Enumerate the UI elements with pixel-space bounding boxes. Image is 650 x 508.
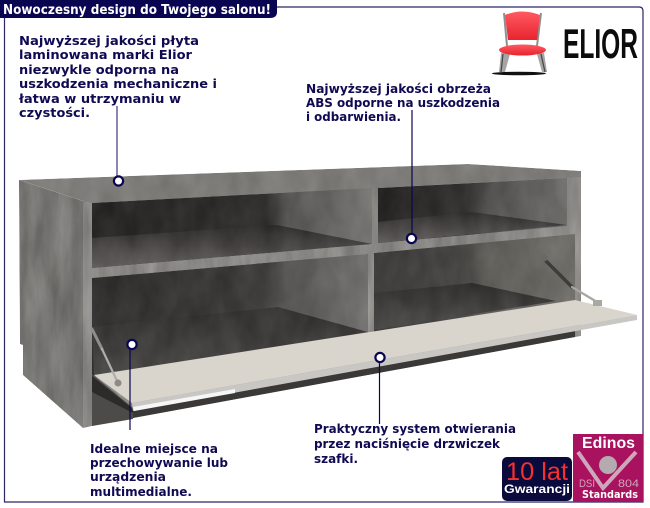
text: laminate board: łatwa w utrzymaniu w: [18, 92, 181, 106]
text: storage space: urządzenia: [90, 470, 166, 484]
text: laminate board: [18, 34, 217, 120]
text: opening system: [314, 422, 516, 466]
text: storage space: [90, 442, 228, 499]
text: opening system: szafki.: [314, 452, 358, 466]
badge: Edinos standards: Standards: [582, 489, 638, 501]
title banner: Nowoczesny design do Twojego salonu!: [3, 3, 271, 18]
lower bay under door: [92, 331, 575, 426]
badge: Edinos standards: 804: [618, 478, 639, 490]
text: laminate board: laminowana marki Elior: [19, 48, 192, 62]
upper right compartment: [378, 178, 567, 243]
callout line and dot: shelf edge: [407, 110, 416, 243]
open door: [94, 300, 637, 411]
callout line and dot: laminate top: [114, 106, 123, 186]
text: laminate board: Najwyższej jakości płyta: [19, 34, 199, 48]
text: storage space: multimedialne.: [90, 485, 192, 499]
text: storage space: Idealne miejsce na: [90, 442, 218, 456]
badge: 10 year warranty: Gwarancji: [504, 482, 570, 496]
text: laminate board: niezwykle odporna na: [19, 63, 179, 77]
text: ABS edging: [306, 82, 500, 124]
logo icon: red chair: [492, 12, 547, 75]
cabinet front base: [83, 172, 581, 428]
callout line and dot: door: [375, 353, 385, 424]
badge: 10 year warranty: [502, 457, 572, 501]
text: laminate board: uszkodzenia mechaniczne i: [19, 77, 217, 91]
right hinge strut: [540, 254, 602, 306]
TV cabinet: [19, 164, 637, 428]
text: storage space: przechowywanie lub: [90, 456, 228, 470]
text: laminate board: czystości.: [19, 106, 90, 120]
lower right compartment: [374, 234, 575, 335]
badge: 10 year warranty: 10 lat: [506, 458, 568, 486]
cabinet top: [19, 164, 581, 203]
text: opening system: Praktyczny system otwierania: [314, 422, 516, 436]
badge: Edinos standards: Edinos: [582, 435, 635, 452]
cabinet side panel: [19, 180, 83, 428]
upper left compartment: [92, 188, 372, 268]
left hinge strut: [92, 329, 122, 386]
callout line and dot: storage: [127, 340, 137, 430]
text: opening system: przez naciśnięcie drzwiczek: [314, 437, 501, 451]
text: ABS edging: i odbarwienia.: [306, 110, 401, 124]
lower left compartment: [92, 254, 368, 376]
badge: Edinos standards: DSI: [579, 478, 595, 490]
badge: Edinos standards: [573, 434, 643, 502]
text: ABS edging: Najwyższej jakości obrzeża: [306, 82, 491, 96]
text: ABS edging: ABS odporne na uszkodzenia: [306, 96, 500, 110]
